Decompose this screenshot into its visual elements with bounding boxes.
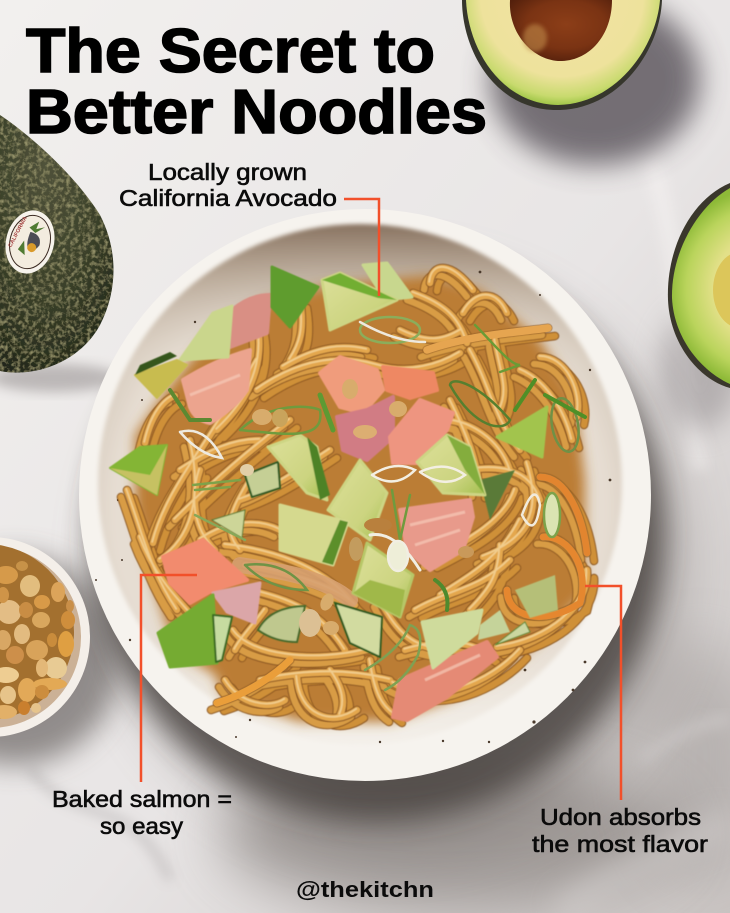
speckles on the glaze xyxy=(95,271,611,743)
credit: handle: @thekitchn xyxy=(296,877,434,902)
icon: whole avocado with sticker xyxy=(0,115,113,373)
title: Better Noodles xyxy=(26,78,487,147)
callout: udon: the most flavor xyxy=(532,831,708,857)
noodles: under strands xyxy=(121,275,594,726)
icon: small bowl of chopped peanuts xyxy=(0,537,90,737)
cucumber slices xyxy=(212,462,558,657)
panel: bowl well xyxy=(98,224,622,744)
callout: baked salmon xyxy=(52,575,232,839)
noodles: saucy orange loops xyxy=(217,328,587,703)
title xyxy=(26,17,487,147)
scallion rings xyxy=(170,317,585,690)
salmon flakes xyxy=(163,295,497,720)
avocado cubes xyxy=(110,263,547,668)
icon: halved avocado, right edge xyxy=(668,183,730,388)
bowl with udon noodles xyxy=(79,209,651,781)
sticker: California xyxy=(0,205,61,279)
title: The Secret to xyxy=(26,17,435,86)
callout: udon xyxy=(532,586,708,857)
icon: halved avocado with pit, top right xyxy=(462,0,662,110)
callout: baked salmon: so easy xyxy=(100,813,184,839)
callout: California avocado: California Avocado xyxy=(119,185,337,211)
callout: California avocado: Locally grown xyxy=(148,159,307,185)
noodles: top strands xyxy=(126,267,587,718)
callout: California avocado xyxy=(119,159,379,296)
callout: udon: Udon absorbs xyxy=(540,804,701,830)
peanuts xyxy=(240,379,474,637)
noodle mass xyxy=(135,275,585,722)
panel: bowl rim xyxy=(79,209,651,781)
callout: baked salmon: Baked salmon = xyxy=(52,786,232,812)
sticker: California: CALIFORNIA xyxy=(8,216,29,249)
